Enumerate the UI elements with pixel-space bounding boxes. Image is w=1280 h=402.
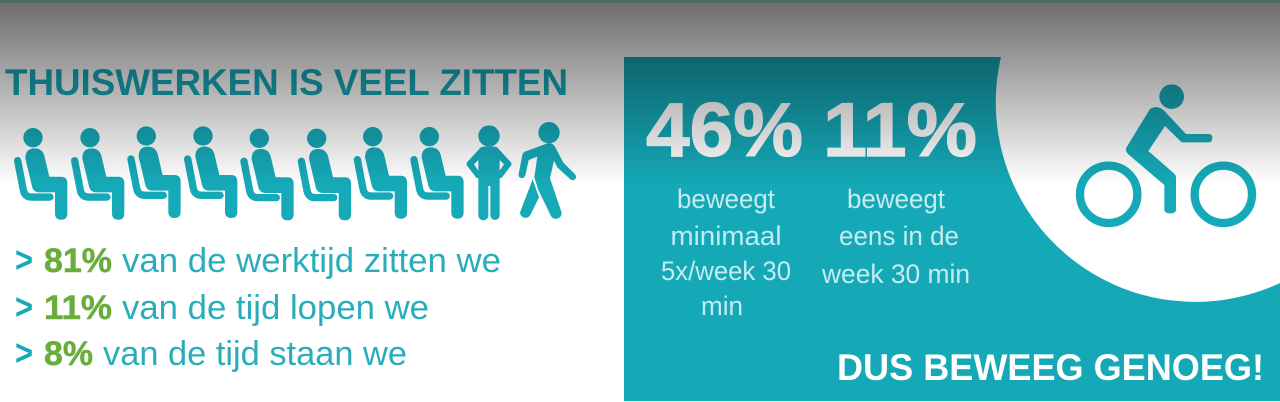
text: list of work time percentages <box>15 239 501 373</box>
icon: sitting person 5 <box>244 129 294 220</box>
text: 46% description: minimaal <box>670 221 782 251</box>
list item: 8% standing: van de tijd staan we <box>103 335 407 373</box>
statistic: 46%: 46% <box>646 88 803 173</box>
text: 11% description: eens in de <box>839 221 959 251</box>
list item: 8% standing: 8% <box>44 335 93 373</box>
list item: 81% sitting: > <box>15 239 33 280</box>
icon: sitting person 3 <box>131 126 181 218</box>
icon: standing person <box>466 125 511 220</box>
text: 11% description <box>821 184 970 289</box>
pictogram row: eight sitting, one standing, one walking <box>18 122 576 220</box>
icon: sitting person 7 <box>357 127 407 219</box>
text: 46% description: min <box>701 291 743 321</box>
panel: movement statistics <box>624 57 1280 401</box>
icon: sitting person 4 <box>188 126 237 218</box>
list item: 81% sitting: van de werktijd zitten we <box>122 242 501 280</box>
icon: cyclist <box>1080 84 1252 223</box>
list item: 8% standing: > <box>15 332 33 373</box>
icon: sitting person 1 <box>18 128 67 220</box>
list item: 11% walking <box>15 286 429 327</box>
icon: sitting person 6 <box>301 129 351 220</box>
statistic: 11%: 11% <box>823 88 977 173</box>
icon: walking person <box>519 122 576 219</box>
text: 46% description <box>661 184 791 321</box>
list item: 11% walking: 11% <box>44 289 112 327</box>
title: THUISWERKEN IS VEEL ZITTEN <box>5 62 568 103</box>
text: 11% description: week 30 min <box>821 259 970 289</box>
list item: 11% walking: > <box>15 286 33 327</box>
text: 11% description: beweegt <box>847 184 945 214</box>
text: 46% description: beweegt <box>677 184 775 214</box>
icon: sitting person 2 <box>75 128 124 220</box>
list item: 11% walking: van de tijd lopen we <box>122 289 429 327</box>
list item: 81% sitting: 81% <box>44 242 112 280</box>
icon: sitting person 8 <box>414 127 464 219</box>
callout: dus beweeg genoeg: DUS BEWEEG GENOEG! <box>837 347 1264 388</box>
text: 46% description: 5x/week 30 <box>661 256 791 286</box>
